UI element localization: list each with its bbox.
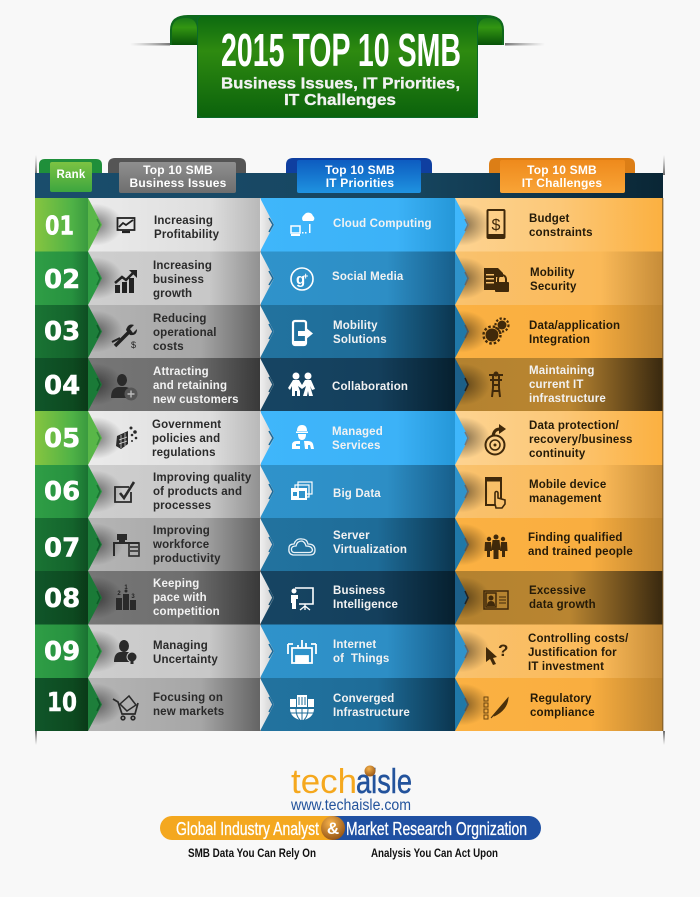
issue text: new markets [153, 706, 224, 718]
priority text: Converged [333, 693, 394, 705]
header: business issues: Business Issues [129, 176, 227, 190]
header: business issues [108, 158, 246, 193]
issue text: business [153, 274, 204, 286]
row 05 [35, 411, 663, 465]
priority text: Cloud Computing [333, 218, 432, 230]
icon: document and lock [484, 268, 509, 292]
issue text: Uncertainty [153, 654, 218, 666]
header band [35, 173, 663, 198]
priority text: Business [333, 585, 385, 597]
row 10 [35, 678, 663, 731]
rank number 02: 02 [44, 265, 80, 295]
icon: gears [484, 318, 508, 344]
rank number 05: 05 [44, 424, 80, 454]
priority text: Services [332, 440, 381, 452]
row 03 [35, 305, 663, 358]
issue text: new customers [153, 394, 239, 406]
table edge shadows [35, 155, 665, 745]
challenge text: Excessive [529, 585, 586, 597]
icon: phone touch [486, 478, 505, 508]
priority text: Managed [332, 426, 383, 438]
priority text: Big Data [333, 488, 381, 500]
priority text: Internet [333, 639, 376, 651]
issue text: Focusing on [153, 692, 223, 704]
right edge shade [662, 198, 664, 731]
challenge text: current IT [529, 379, 584, 391]
issue text: competition [153, 606, 220, 618]
icon: internet of things circuit [288, 640, 316, 663]
challenge text: recovery/business [529, 434, 633, 446]
tagline pill [160, 816, 541, 840]
priority text: Solutions [333, 334, 387, 346]
rank number 01: 01 [45, 212, 74, 242]
icon: google plus: g [296, 271, 305, 288]
logo: techaisle [291, 763, 412, 801]
subtitle: IT Challenges [284, 92, 396, 109]
header: it challenges [489, 158, 635, 193]
challenge text: IT investment [528, 661, 604, 673]
icon: person add [111, 374, 138, 400]
issue text: growth [153, 288, 192, 300]
icon: google plus: + [303, 271, 308, 281]
rank number 04: 04 [44, 371, 80, 401]
icon: wrench and dollar: $ [131, 340, 136, 350]
icon: id card [484, 591, 508, 609]
issue text: Attracting [153, 366, 209, 378]
tagline pill: Market Research Orgnization [346, 819, 527, 839]
icon: budget phone: $ [492, 217, 501, 234]
icon: person with bulb [114, 640, 137, 664]
icon: worker with wrench [292, 425, 314, 449]
subtitle: Business Issues, IT Priorities, [221, 76, 460, 92]
icon: checklist and quill [484, 697, 508, 719]
issue text: processes [153, 500, 211, 512]
header: it priorities [286, 158, 432, 193]
row 07 [35, 518, 663, 571]
priority text: Virtualization [333, 544, 407, 556]
challenge text: Budget [529, 213, 570, 225]
icon: transmission tower [489, 372, 503, 397]
challenge text: Regulatory [530, 693, 592, 705]
icon: group of people [484, 534, 508, 559]
issue text: workforce [152, 539, 209, 551]
rank number 09: 09 [44, 637, 80, 667]
issue text: Increasing [153, 260, 212, 272]
website url: www.techaisle.com [290, 797, 411, 814]
header: it challenges: Top 10 SMB [527, 163, 597, 177]
icon: podium: 1 [124, 585, 128, 591]
icon: two people holding hands [288, 372, 315, 396]
icon: budget phone [488, 210, 504, 238]
header: it priorities: IT Priorities [326, 176, 394, 190]
priority text: Infrastructure [333, 707, 410, 719]
issue text: Improving [153, 525, 210, 537]
icon: checkbox [115, 482, 134, 502]
challenge text: data growth [529, 599, 596, 611]
slogan right: Analysis You Can Act Upon [371, 846, 498, 860]
row 06 [35, 465, 663, 518]
challenge text: continuity [529, 448, 586, 460]
logo: techaisle: tech [291, 763, 357, 801]
header: rank [39, 159, 102, 192]
icon: dotted cube [116, 426, 137, 449]
tagline pill: & [327, 819, 339, 838]
icon: podium: 2 [117, 591, 121, 597]
issue text: costs [153, 341, 184, 353]
challenge text: compliance [530, 707, 595, 719]
tagline pill: Global Industry Analyst [176, 819, 319, 839]
challenge text: and trained people [528, 546, 633, 558]
icon: shopping cart [113, 696, 138, 720]
issue text: Managing [153, 640, 208, 652]
challenge text: Mobility [530, 267, 575, 279]
priority text: Social Media [332, 271, 404, 283]
issue text: of products and [153, 486, 242, 498]
challenge text: Security [530, 281, 577, 293]
icon: monitor chart [118, 218, 134, 232]
challenge text: Integration [529, 334, 590, 346]
issue text: and retaining [153, 380, 227, 392]
title ribbon [130, 15, 545, 118]
issue text: productivity [153, 553, 221, 565]
challenge text: Maintaining [529, 365, 595, 377]
issue text: pace with [153, 592, 207, 604]
issue text: Profitability [154, 229, 220, 241]
issue text: policies and [152, 433, 220, 445]
priority text: Collaboration [332, 381, 408, 393]
challenge text: Controlling costs/ [528, 633, 629, 645]
icon: cloud outline [289, 539, 315, 555]
icon: buildings and globe [290, 695, 314, 720]
rank number 08: 08 [44, 584, 80, 614]
issue text: Improving quality [153, 472, 252, 484]
icon: cursor and question mark [486, 641, 508, 665]
header: it challenges: IT Challenges [522, 176, 602, 190]
priority text: Intelligence [333, 599, 398, 611]
icon: cursor and question mark: ? [498, 641, 508, 660]
icon: presenter [291, 588, 313, 610]
row 08 [35, 571, 663, 624]
icon: folders [291, 482, 312, 500]
title text: 2015 TOP 10 SMB [221, 24, 461, 76]
row 02 [35, 252, 663, 305]
slogan left: SMB Data You Can Rely On [188, 846, 316, 860]
issue text: Government [152, 419, 221, 431]
header: business issues: Top 10 SMB [143, 163, 213, 177]
row 04 [35, 358, 663, 411]
icon: podium [116, 585, 136, 610]
challenge text: Data/application [529, 320, 620, 332]
priority text: Mobility [333, 320, 378, 332]
priority text: Server [333, 530, 370, 542]
icon: cloud computer [291, 213, 314, 236]
logo: techaisle: aisle [356, 763, 412, 801]
row 01 [35, 198, 663, 252]
logo ball [364, 766, 376, 776]
issue text: Increasing [154, 215, 213, 227]
issue text: regulations [152, 447, 216, 459]
rank number 10: 10 [47, 688, 77, 718]
rank number 07: 07 [44, 534, 80, 564]
issue text: operational [153, 327, 217, 339]
challenge text: constraints [529, 227, 593, 239]
issue text: Keeping [153, 578, 199, 590]
icon: wrench and dollar [112, 325, 137, 350]
challenge text: Data protection/ [529, 420, 620, 432]
rank number 03: 03 [44, 317, 80, 347]
challenge text: infrastructure [529, 393, 606, 405]
priority text: of Things [333, 653, 389, 665]
row 09 [35, 624, 663, 678]
icon: phone with arrow [293, 321, 313, 345]
header: it priorities: Top 10 SMB [325, 163, 395, 177]
icon: google plus [291, 268, 313, 290]
issue text: Reducing [153, 313, 207, 325]
challenge text: Justification for [528, 647, 617, 659]
challenge text: Mobile device [529, 479, 606, 491]
icon: desk [113, 534, 139, 556]
rank number 06: 06 [44, 477, 80, 507]
subtitle [221, 76, 460, 109]
header: rank: Rank [57, 169, 86, 181]
challenge text: Finding qualified [528, 532, 623, 544]
challenge text: management [529, 493, 601, 505]
icon: disc with arrow [486, 424, 506, 454]
icon: podium: 3 [131, 594, 135, 600]
icon: growth chart [115, 270, 137, 293]
